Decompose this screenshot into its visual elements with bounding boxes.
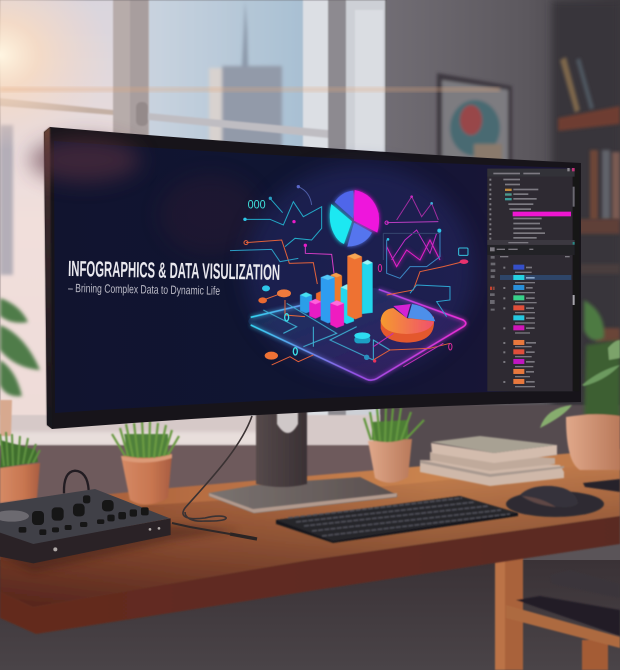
wall with framed picture and shelves [387,0,620,450]
mixer body [0,518,171,563]
audio mixer [0,471,171,563]
tool icons [490,256,495,311]
window sill and lower wall [0,405,620,505]
mouse and mouse pad [506,486,604,517]
magenta selected row [513,212,571,216]
cable [183,416,252,521]
stand neck [256,405,307,487]
framed picture [437,73,512,165]
stand base [209,477,397,513]
potted plant: centre left [112,421,179,505]
stack of books [420,436,564,486]
isometric platform [248,288,466,380]
sun glare [0,0,110,150]
potted plant: right with leaves [540,300,620,470]
desk legs and stool [495,550,620,670]
mixer knobs [19,495,149,535]
potted plant: left on desk [0,432,40,503]
cable hole [277,412,298,433]
magenta line chart [383,197,440,278]
desk shadow under mixer [0,525,240,572]
skyscraper [209,0,282,153]
monitor stand [172,405,397,539]
node markers [243,185,468,363]
monitor [30,127,581,429]
layers panel rows [489,173,570,257]
cyan disc [354,332,370,343]
circuit lines: orange and cyan [230,187,463,367]
3D pie chart [381,304,435,343]
screen subtitle: – Brining Complex Data to Dynamic Life [68,281,220,298]
potted plant: far left on sill [0,298,40,436]
data visualization illustration [230,185,468,380]
floating pie chart [330,190,379,247]
floor [0,560,620,670]
shelf books [560,57,620,220]
screen title: INFOGRAPHICS & DATA VISULIZATION [68,256,280,285]
bar chart [300,253,373,328]
keyboard keys [288,498,510,536]
mixer display [0,510,29,522]
lens flare streak [0,87,500,92]
keyboard [276,496,518,543]
monitor screen [54,141,574,413]
timeline rows [500,265,571,384]
desk [0,449,620,634]
mixer cable loop [64,471,89,493]
scrollbars [573,187,575,207]
shelves [558,106,620,342]
monitor bezel [44,127,581,429]
window with city view [0,0,388,440]
design software side panel [487,168,579,391]
tablet on desk [583,479,620,492]
potted plant: centre right [364,406,424,483]
counter digits: 000 [248,198,266,212]
